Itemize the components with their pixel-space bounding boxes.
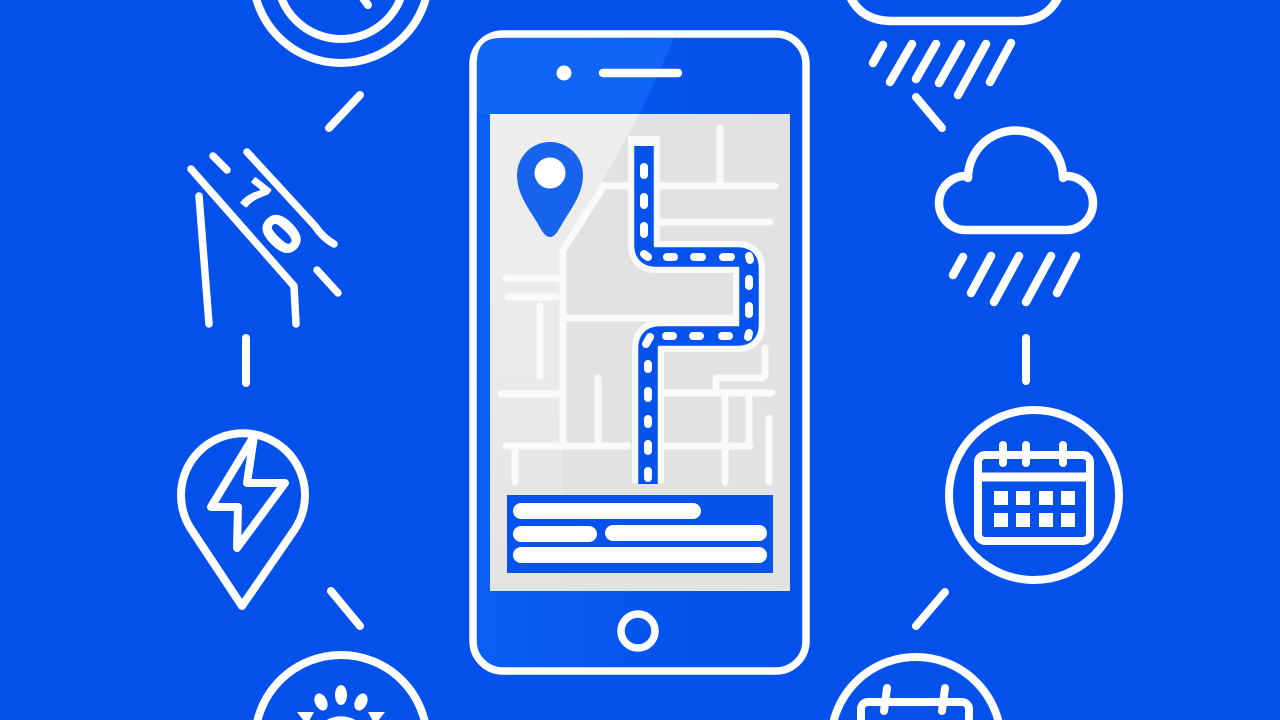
info bar 4 xyxy=(513,547,767,563)
icon: sun badge xyxy=(255,655,427,720)
cloud outline xyxy=(939,130,1093,230)
panel background xyxy=(507,495,773,573)
route dashes xyxy=(644,167,750,478)
lane dashes xyxy=(213,156,338,293)
lightning bolt xyxy=(211,436,285,548)
speed number xyxy=(232,172,315,267)
info bar 2 xyxy=(513,526,597,542)
badge ring xyxy=(255,655,427,720)
route outline xyxy=(644,136,749,483)
digit zero: 0 xyxy=(248,200,315,267)
route line xyxy=(644,146,749,484)
cloud base xyxy=(849,0,1060,21)
speaker xyxy=(603,69,678,77)
badge ring xyxy=(949,410,1119,580)
info bar 1 xyxy=(513,503,701,519)
badge ring xyxy=(831,657,1001,720)
pin shape xyxy=(517,142,583,237)
phone body xyxy=(473,34,806,671)
calendar frame xyxy=(978,455,1090,541)
phone xyxy=(473,34,806,671)
home button xyxy=(621,614,655,648)
rain lines xyxy=(953,256,1076,302)
info bar 3 xyxy=(605,525,767,541)
map light area xyxy=(490,114,640,591)
connector dashes xyxy=(246,95,1026,626)
gauge needle xyxy=(360,0,368,5)
icon: bottom calendar badge xyxy=(831,657,1001,720)
info panel xyxy=(507,495,773,573)
icon: gauge xyxy=(253,0,429,63)
calendar header line xyxy=(978,472,1090,482)
calendar pegs xyxy=(1003,445,1063,463)
icon: calendar badge xyxy=(949,410,1119,580)
digit seven: 7 xyxy=(232,172,276,220)
icon: top rain cloud xyxy=(849,0,1060,95)
icon: charging pin xyxy=(181,433,305,606)
road edges xyxy=(191,152,334,324)
sun rays xyxy=(297,685,385,720)
icon: rain cloud xyxy=(939,130,1093,302)
gauge inner ring xyxy=(277,0,405,39)
calendar pegs xyxy=(884,688,945,711)
map screen xyxy=(490,114,790,591)
map roads xyxy=(501,128,775,482)
location pin xyxy=(517,142,583,237)
gauge outer ring xyxy=(253,0,429,63)
pin outline xyxy=(181,433,305,606)
icon: speed limit road xyxy=(191,152,338,324)
screen reflection xyxy=(477,38,674,114)
calendar frame xyxy=(861,702,969,720)
route xyxy=(644,136,750,484)
calendar days xyxy=(994,491,1075,527)
rain lines xyxy=(873,43,1011,95)
pin hole xyxy=(534,158,566,188)
front camera xyxy=(556,66,572,80)
map background xyxy=(490,114,790,591)
